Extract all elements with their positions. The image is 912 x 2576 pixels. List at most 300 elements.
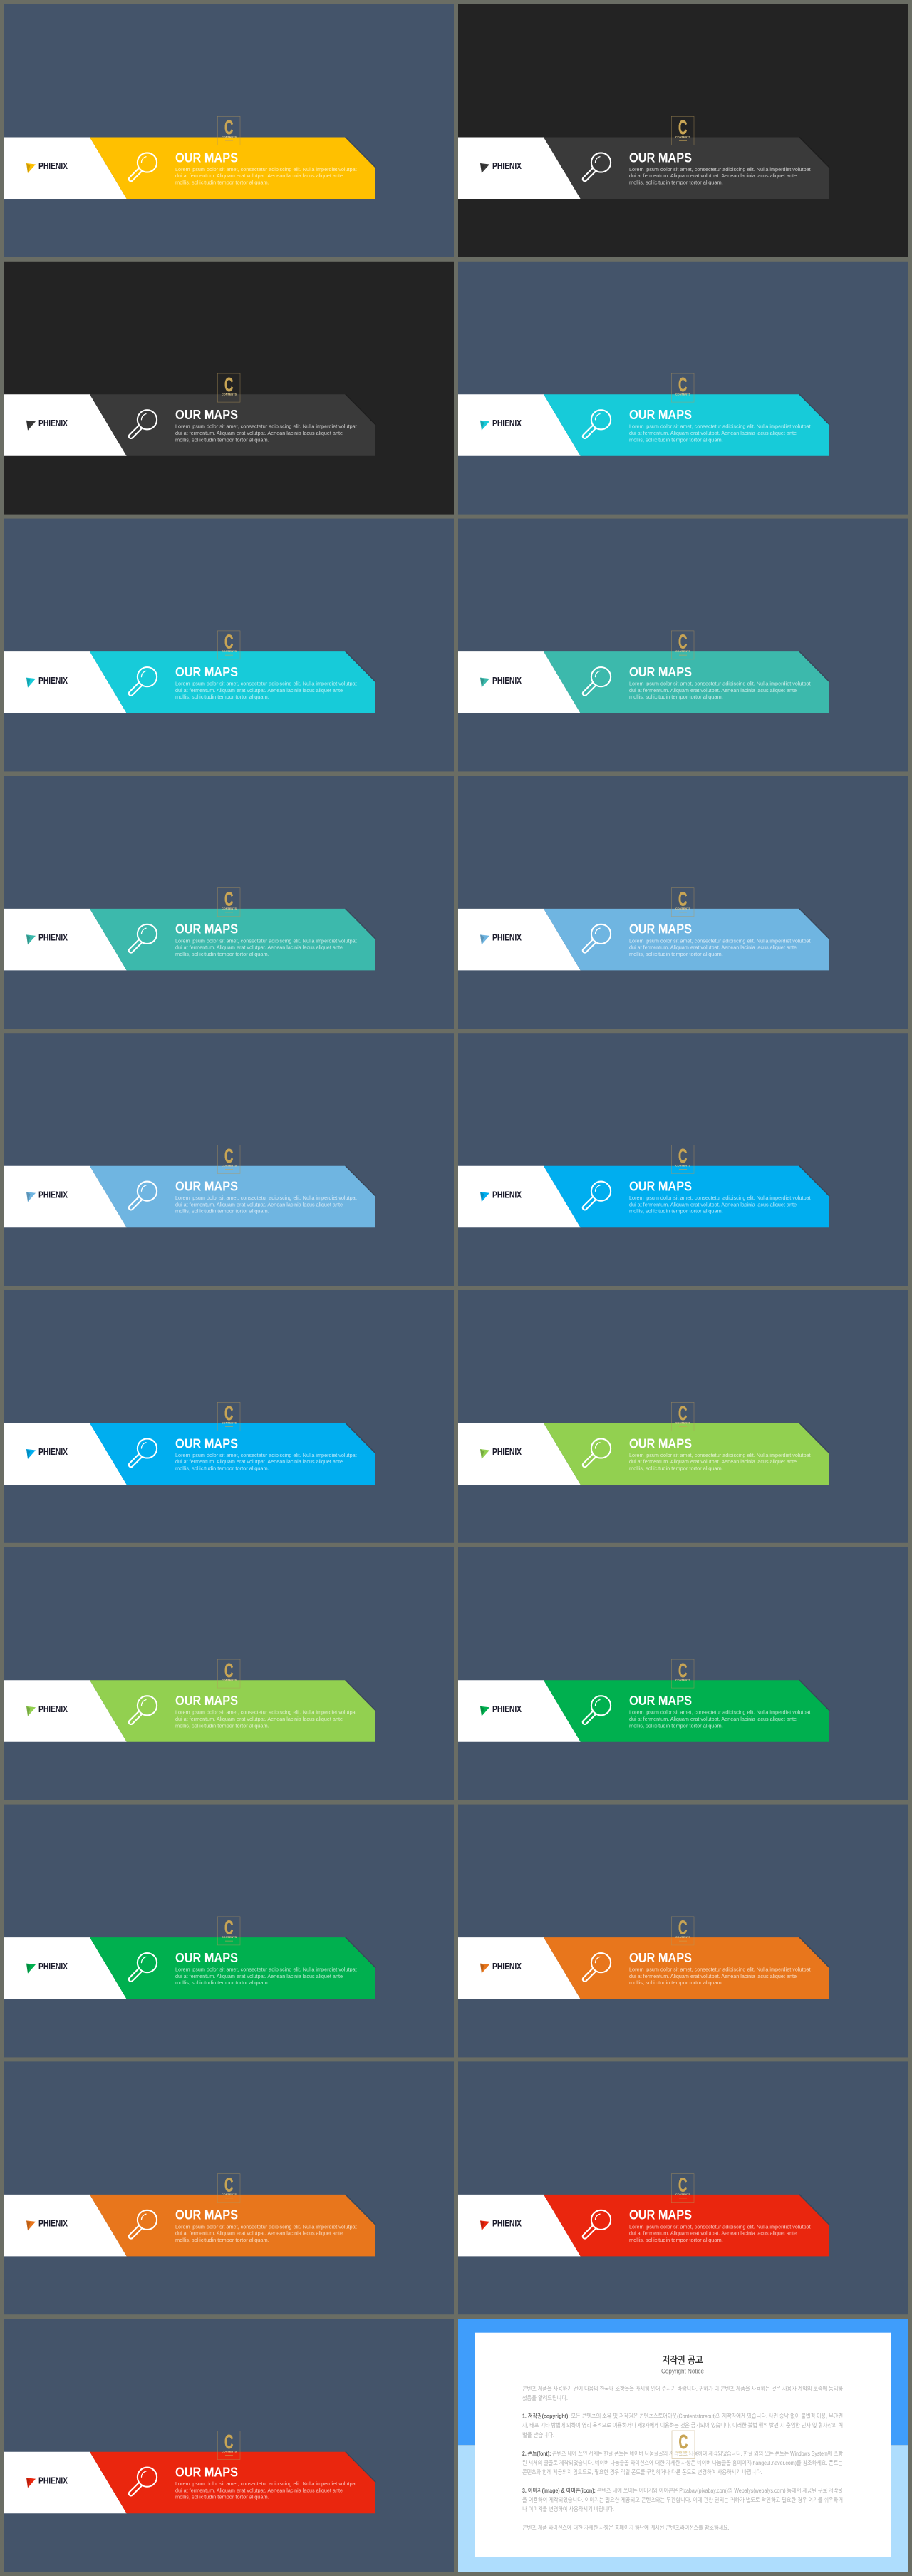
slide background (458, 1290, 908, 1543)
watermark stamp (671, 1659, 694, 1688)
white logo tab (4, 1423, 127, 1485)
notice intro (522, 2385, 843, 2401)
heading: OUR MAPS (629, 1694, 692, 1708)
body text (629, 1452, 812, 1471)
body text (175, 937, 358, 957)
panel: slide 9 light blue (4, 1033, 454, 1286)
body text: mollis, sollicitudin tempor tortor aliquam. (175, 694, 269, 700)
heading: OUR MAPS (175, 1436, 238, 1451)
icon: brand logo (26, 1449, 36, 1459)
brand name: PHIENIX (492, 933, 522, 943)
watermark stamp: CONTENTS (675, 1679, 691, 1681)
panel: copyright notice (458, 2319, 908, 2572)
body text: mollis, sollicitudin tempor tortor aliquam. (629, 694, 723, 700)
body text: Lorem ipsum dolor sit amet, consectetur adipiscing elit. Nulla imperdiet volutpat (629, 2223, 812, 2230)
icon: magnifying glass (129, 2468, 157, 2495)
icon: magnifying glass (583, 410, 611, 438)
brand name: PHIENIX (38, 2219, 68, 2229)
brand name: PHIENIX (38, 933, 68, 943)
watermark stamp: C (678, 1145, 687, 1167)
notice section 1: 사, 배포 기타 방법에 의하여 영리 목적으로 이용하거나 제3자에게 이용하는 것은 금지되어 있습니다. 이러한 불법 행위 발견 시 준엄한 민사 및 형사상의 처 (522, 2422, 843, 2429)
brand name: PHIENIX (492, 1704, 522, 1714)
watermark stamp (672, 2431, 695, 2459)
body text: dui at fermentum. Aliquam erat volutpat. Aenean lacinia lacus aliquet ante (629, 430, 797, 436)
body text: Lorem ipsum dolor sit amet, consectetur adipiscing elit. Nulla imperdiet volutpat (175, 166, 358, 172)
brand name: PHIENIX (38, 1704, 68, 1714)
coloured banner (544, 909, 829, 970)
slide background (458, 776, 908, 1029)
coloured banner (90, 137, 375, 199)
white logo tab (458, 1423, 581, 1485)
watermark stamp: C (224, 116, 233, 138)
panel: slide 6 teal (458, 519, 908, 771)
panel: slide 4 cyan (458, 262, 908, 515)
icon: brand logo (480, 1192, 489, 1202)
icon: magnifying glass (583, 2210, 611, 2239)
panel: slide 12 lime green (458, 1290, 908, 1543)
watermark stamp: C (224, 2173, 233, 2195)
coloured banner (90, 1680, 375, 1742)
coloured banner (90, 1937, 375, 1999)
heading: OUR MAPS (175, 150, 238, 165)
body text: mollis, sollicitudin tempor tortor aliquam. (175, 2494, 269, 2500)
icon: brand logo (26, 934, 36, 944)
icon: magnifying glass (583, 667, 611, 696)
white logo tab (458, 651, 581, 713)
body text: dui at fermentum. Aliquam erat volutpat. Aenean lacinia lacus aliquet ante (175, 430, 343, 436)
brand name: PHIENIX (492, 1190, 522, 1200)
body text: Lorem ipsum dolor sit amet, consectetur adipiscing elit. Nulla imperdiet volutpat (175, 1452, 358, 1458)
body text: dui at fermentum. Aliquam erat volutpat. Aenean lacinia lacus aliquet ante (175, 1716, 343, 1722)
slide background (4, 262, 454, 515)
watermark stamp: CONTENTS (675, 1165, 691, 1168)
watermark stamp: C (678, 887, 687, 910)
watermark stamp: CONTENTS (222, 650, 237, 653)
watermark stamp: C (678, 1917, 687, 1939)
panel: slide 8 light blue (458, 776, 908, 1029)
icon: brand logo (480, 1706, 489, 1716)
body text: dui at fermentum. Aliquam erat volutpat. Aenean lacinia lacus aliquet ante (629, 1201, 797, 1207)
watermark stamp: C (678, 373, 687, 396)
slide background (4, 1547, 454, 1800)
heading: OUR MAPS (629, 665, 692, 679)
slide background (458, 519, 908, 771)
white notice card (475, 2333, 891, 2557)
coloured banner (544, 1166, 829, 1227)
slide background (458, 1033, 908, 1286)
coloured banner (544, 1937, 829, 1999)
body text: mollis, sollicitudin tempor tortor aliquam. (175, 1722, 269, 1729)
icon: brand logo (26, 163, 36, 173)
body text (175, 1966, 358, 1986)
body text (175, 1452, 358, 1471)
body text: Lorem ipsum dolor sit amet, consectetur adipiscing elit. Nulla imperdiet volutpat (175, 1195, 358, 1201)
body text (175, 1709, 358, 1729)
body text: Lorem ipsum dolor sit amet, consectetur adipiscing elit. Nulla imperdiet volutpat (175, 680, 358, 686)
watermark stamp: CONTENTS (222, 2451, 237, 2453)
slide background (4, 1805, 454, 2057)
body text: mollis, sollicitudin tempor tortor aliquam. (629, 180, 723, 185)
coloured banner (90, 909, 375, 970)
heading: OUR MAPS (175, 922, 238, 937)
coloured banner (90, 651, 375, 713)
watermark stamp: CONTENTS (222, 393, 237, 396)
white logo tab (4, 909, 127, 970)
heading: OUR MAPS (175, 1179, 238, 1193)
body text (175, 423, 358, 443)
body text: dui at fermentum. Aliquam erat volutpat. Aenean lacinia lacus aliquet ante (175, 1201, 343, 1207)
white logo tab (458, 1166, 581, 1227)
watermark stamp: CONTENTS (222, 1421, 237, 1424)
body text: dui at fermentum. Aliquam erat volutpat. Aenean lacinia lacus aliquet ante (175, 2487, 343, 2493)
watermark stamp: C (678, 2431, 688, 2453)
watermark stamp: C (678, 1659, 687, 1681)
coloured banner (544, 1680, 829, 1742)
watermark stamp (671, 2173, 694, 2203)
icon: magnifying glass (583, 153, 611, 181)
brand name: PHIENIX (492, 1447, 522, 1457)
white logo tab (4, 1166, 127, 1227)
body text (629, 1966, 812, 1986)
body text: mollis, sollicitudin tempor tortor aliquam. (629, 1208, 723, 1215)
watermark stamp: C (678, 1402, 687, 1424)
watermark stamp: CONTENTS (675, 1421, 691, 1424)
panel: slide 18 red (458, 2061, 908, 2314)
brand name: PHIENIX (38, 1962, 68, 1972)
watermark stamp (217, 373, 240, 402)
body text: mollis, sollicitudin tempor tortor aliquam. (629, 1722, 723, 1729)
icon: magnifying glass (583, 1953, 611, 1982)
body text: Lorem ipsum dolor sit amet, consectetur adipiscing elit. Nulla imperdiet volutpat (629, 680, 812, 686)
icon: brand logo (480, 678, 489, 688)
watermark stamp: CONTENTS (222, 1936, 237, 1939)
watermark stamp (217, 1145, 240, 1173)
icon: magnifying glass (129, 2210, 157, 2239)
coloured banner (544, 651, 829, 713)
body text: dui at fermentum. Aliquam erat volutpat. Aenean lacinia lacus aliquet ante (175, 687, 343, 694)
body text: Lorem ipsum dolor sit amet, consectetur adipiscing elit. Nulla imperdiet volutpat (629, 1967, 812, 1973)
notice section 3 (522, 2487, 843, 2513)
brand name: PHIENIX (492, 161, 522, 171)
watermark stamp: C (678, 116, 687, 138)
watermark stamp: C (224, 2431, 233, 2453)
coloured banner (544, 1423, 829, 1485)
body text (629, 680, 812, 700)
brand name: PHIENIX (492, 418, 522, 428)
watermark stamp: CONTENTS (675, 650, 691, 653)
white logo tab (4, 394, 127, 456)
body text (629, 1709, 812, 1729)
coloured banner (90, 2452, 375, 2513)
body text: mollis, sollicitudin tempor tortor aliquam. (629, 1979, 723, 1986)
panel: slide 7 teal (4, 776, 454, 1029)
notice section 1: 1. 저작권(copyright): 모든 콘텐츠의 소유 및 저작권은 콘텐츠스토어아웃(Contentstoreout)의 제작자에게 있습니다. 사전 승낙 없이 불법적 이용, 무단전 (522, 2412, 843, 2419)
body text: Lorem ipsum dolor sit amet, consectetur adipiscing elit. Nulla imperdiet volutpat (629, 1452, 812, 1458)
icon: magnifying glass (583, 924, 611, 953)
body text: dui at fermentum. Aliquam erat volutpat. Aenean lacinia lacus aliquet ante (175, 172, 343, 179)
body text: mollis, sollicitudin tempor tortor aliquam. (175, 1208, 269, 1215)
icon: magnifying glass (583, 1182, 611, 1210)
coloured banner (544, 2195, 829, 2256)
slide background (458, 262, 908, 515)
body text: mollis, sollicitudin tempor tortor aliquam. (629, 436, 723, 443)
body text: Lorem ipsum dolor sit amet, consectetur adipiscing elit. Nulla imperdiet volutpat (629, 937, 812, 944)
watermark stamp (217, 1402, 240, 1431)
body text: Lorem ipsum dolor sit amet, consectetur adipiscing elit. Nulla imperdiet volutpat (175, 2223, 358, 2230)
notice subtitle: Copyright Notice (661, 2368, 704, 2375)
slide background (4, 776, 454, 1029)
body text: mollis, sollicitudin tempor tortor aliquam. (175, 1465, 269, 1471)
notice section 3: 을 이용하여 제작되었습니다. 이미지는 필요한 제공되고 콘텐츠와는 무관합니다. 이에 관한 권리는 귀하가 별도로 확인하고 필요한 경우 여기를 쉬우하거 (522, 2496, 843, 2503)
brand name: PHIENIX (492, 2219, 522, 2229)
white logo tab (4, 2452, 127, 2513)
heading: OUR MAPS (629, 922, 692, 937)
body text (629, 2223, 812, 2243)
watermark stamp (671, 631, 694, 659)
icon: brand logo (480, 1449, 489, 1459)
brand name: PHIENIX (38, 418, 68, 428)
blue upper background (458, 2319, 908, 2445)
brand name: PHIENIX (38, 161, 68, 171)
icon: brand logo (26, 2220, 36, 2230)
white logo tab (4, 1680, 127, 1742)
watermark stamp (217, 2173, 240, 2203)
slide background (458, 4, 908, 257)
watermark stamp: C (678, 631, 687, 653)
brand name: PHIENIX (492, 676, 522, 686)
slide background (4, 519, 454, 771)
body text (175, 1195, 358, 1215)
watermark stamp: C (224, 631, 233, 653)
watermark stamp: CONTENTS (675, 907, 691, 910)
white logo tab (458, 909, 581, 970)
slide background (458, 2061, 908, 2314)
body text: dui at fermentum. Aliquam erat volutpat. Aenean lacinia lacus aliquet ante (629, 944, 797, 951)
watermark stamp: CONTENTS (222, 907, 237, 910)
notice closing line: 콘텐츠 제품 라이선스에 대한 자세한 사항은 홈페이지 하단에 게시된 콘텐츠라이선스를 참조하세요. (522, 2524, 730, 2531)
panel: slide 15 green (4, 1805, 454, 2057)
watermark stamp: CONTENTS (222, 135, 237, 138)
brand name: PHIENIX (38, 1190, 68, 1200)
heading: OUR MAPS (175, 1951, 238, 1965)
watermark stamp: C (224, 1917, 233, 1939)
body text (175, 2480, 358, 2500)
watermark stamp: CONTENTS (222, 1165, 237, 1168)
notice section 2: 콘텐츠와 함께 제공되지 않으므로, 필요한 경우 적절 폰트를 구입하거나 다른 폰트로 변경하여 사용하시기 바랍니다. (522, 2468, 762, 2475)
icon: magnifying glass (129, 667, 157, 696)
slide background (458, 1547, 908, 1800)
icon: magnifying glass (129, 1182, 157, 1210)
body text (629, 166, 812, 185)
body text: Lorem ipsum dolor sit amet, consectetur adipiscing elit. Nulla imperdiet volutpat (629, 423, 812, 430)
icon: magnifying glass (129, 410, 157, 438)
white logo tab (458, 137, 581, 199)
watermark stamp: C (224, 373, 233, 396)
body text: Lorem ipsum dolor sit amet, consectetur adipiscing elit. Nulla imperdiet volutpat (175, 423, 358, 430)
body text: dui at fermentum. Aliquam erat volutpat. Aenean lacinia lacus aliquet ante (175, 944, 343, 951)
icon: magnifying glass (583, 1696, 611, 1724)
notice section 2 (522, 2450, 843, 2475)
body text: dui at fermentum. Aliquam erat volutpat. Aenean lacinia lacus aliquet ante (175, 1458, 343, 1465)
heading: OUR MAPS (175, 2208, 238, 2222)
body text: dui at fermentum. Aliquam erat volutpat. Aenean lacinia lacus aliquet ante (629, 172, 797, 179)
heading: OUR MAPS (175, 1694, 238, 1708)
panel: slide 3 dark (4, 262, 454, 515)
panel: slide 17 orange (4, 2061, 454, 2314)
notice title: 저작권 공고 (663, 2354, 703, 2366)
watermark stamp (217, 887, 240, 917)
body text: mollis, sollicitudin tempor tortor aliquam. (175, 1979, 269, 1986)
heading: OUR MAPS (629, 408, 692, 422)
panel: slide 1 yellow (4, 4, 454, 257)
body text: dui at fermentum. Aliquam erat volutpat. Aenean lacinia lacus aliquet ante (629, 2230, 797, 2237)
notice section 2: 2. 폰트(font): 콘텐츠 내에 쓰인 서체는 한글 폰트는 네이버 나눔글꼴의 저작물을 사용하여 제작되었습니다. 한글 외의 모든 폰트는 Windows System에 포함 (522, 2450, 843, 2457)
watermark stamp (217, 1917, 240, 1945)
icon: magnifying glass (129, 1953, 157, 1982)
notice section 3: 나 이미지를 변경하여 사용하시기 바랍니다. (522, 2505, 614, 2513)
slide background (4, 2319, 454, 2572)
heading: OUR MAPS (175, 408, 238, 422)
icon: brand logo (26, 678, 36, 688)
coloured banner (544, 137, 829, 199)
panel: slide 2 dark (458, 4, 908, 257)
body text: dui at fermentum. Aliquam erat volutpat. Aenean lacinia lacus aliquet ante (629, 1973, 797, 1979)
heading: OUR MAPS (629, 150, 692, 165)
slide background (4, 4, 454, 257)
panel: slide 11 blue (4, 1290, 454, 1543)
icon: brand logo (480, 2220, 489, 2230)
icon: brand logo (480, 421, 489, 431)
brand name: PHIENIX (38, 1447, 68, 1457)
icon: brand logo (26, 2478, 36, 2488)
body text: Lorem ipsum dolor sit amet, consectetur adipiscing elit. Nulla imperdiet volutpat (629, 1709, 812, 1716)
panel: slide 16 orange (458, 1805, 908, 2057)
body text: Lorem ipsum dolor sit amet, consectetur adipiscing elit. Nulla imperdiet volutpat (175, 937, 358, 944)
white logo tab (4, 2195, 127, 2256)
panel: slide 10 blue (458, 1033, 908, 1286)
body text: dui at fermentum. Aliquam erat volutpat. Aenean lacinia lacus aliquet ante (629, 1716, 797, 1722)
icon: brand logo (26, 421, 36, 431)
watermark stamp (217, 631, 240, 659)
slide background (4, 1033, 454, 1286)
body text: Lorem ipsum dolor sit amet, consectetur adipiscing elit. Nulla imperdiet volutpat (629, 166, 812, 172)
slide background (4, 1290, 454, 1543)
heading: OUR MAPS (629, 1436, 692, 1451)
watermark stamp: C (224, 1402, 233, 1424)
body text: dui at fermentum. Aliquam erat volutpat. Aenean lacinia lacus aliquet ante (175, 1973, 343, 1979)
body text: Lorem ipsum dolor sit amet, consectetur adipiscing elit. Nulla imperdiet volutpat (175, 1967, 358, 1973)
watermark stamp: C (224, 887, 233, 910)
icon: brand logo (480, 1964, 489, 1974)
icon: magnifying glass (129, 1696, 157, 1724)
body text (629, 1195, 812, 1215)
icon: magnifying glass (583, 1438, 611, 1467)
body text: Lorem ipsum dolor sit amet, consectetur adipiscing elit. Nulla imperdiet volutpat (629, 1195, 812, 1201)
body text (175, 680, 358, 700)
coloured banner (90, 2195, 375, 2256)
icon: brand logo (480, 163, 489, 173)
coloured banner (90, 394, 375, 456)
notice section 1 (522, 2412, 843, 2438)
body text: Lorem ipsum dolor sit amet, consectetur adipiscing elit. Nulla imperdiet volutpat (175, 2480, 358, 2487)
watermark stamp: C (224, 1659, 233, 1681)
panel: slide 5 cyan (4, 519, 454, 771)
coloured banner (544, 394, 829, 456)
body text (629, 937, 812, 957)
body text: dui at fermentum. Aliquam erat volutpat. Aenean lacinia lacus aliquet ante (175, 2230, 343, 2237)
brand name: PHIENIX (38, 2475, 68, 2485)
watermark stamp (671, 1402, 694, 1431)
white logo tab (458, 1937, 581, 1999)
panel: slide 19 red (4, 2319, 454, 2572)
watermark stamp: CONTENTS (675, 1936, 691, 1939)
watermark stamp: CONTENTS (676, 2451, 691, 2453)
body text: dui at fermentum. Aliquam erat volutpat. Aenean lacinia lacus aliquet ante (629, 687, 797, 694)
watermark stamp (671, 116, 694, 145)
icon: magnifying glass (129, 153, 157, 181)
white logo tab (458, 1680, 581, 1742)
watermark stamp (217, 116, 240, 145)
icon: brand logo (480, 934, 489, 944)
body text: Lorem ipsum dolor sit amet, consectetur adipiscing elit. Nulla imperdiet volutpat (175, 1709, 358, 1716)
watermark stamp: CONTENTS (222, 2193, 237, 2196)
icon: magnifying glass (129, 924, 157, 953)
white logo tab (4, 651, 127, 713)
watermark stamp: CONTENTS (675, 393, 691, 396)
icon: magnifying glass (129, 1438, 157, 1467)
watermark stamp: C (678, 2173, 687, 2195)
watermark stamp (217, 1659, 240, 1688)
body text (175, 2223, 358, 2243)
watermark stamp (671, 373, 694, 402)
brand name: PHIENIX (38, 676, 68, 686)
notice section 1: 벌을 받습니다. (522, 2431, 554, 2438)
heading: OUR MAPS (175, 2465, 238, 2479)
icon: brand logo (26, 1964, 36, 1974)
body text: mollis, sollicitudin tempor tortor aliquam. (629, 951, 723, 957)
watermark stamp (671, 887, 694, 917)
icon: brand logo (26, 1192, 36, 1202)
heading: OUR MAPS (629, 1179, 692, 1193)
white logo tab (4, 137, 127, 199)
icon: brand logo (26, 1706, 36, 1716)
notice intro: 콘텐츠 제품을 사용하기 전에 다음의 한국내 조항들을 자세히 읽어 주시기 바랍니다. 귀하가 이 콘텐츠 제품을 사용하는 것은 사용자 계약의 보증에 동의하 (522, 2385, 843, 2392)
body text: mollis, sollicitudin tempor tortor aliquam. (175, 951, 269, 957)
heading: OUR MAPS (629, 1951, 692, 1965)
body text: mollis, sollicitudin tempor tortor aliquam. (175, 180, 269, 185)
watermark stamp (671, 1145, 694, 1173)
body text (629, 423, 812, 443)
body text: mollis, sollicitudin tempor tortor aliquam. (175, 2237, 269, 2243)
coloured banner (90, 1166, 375, 1227)
notice section 2: 된 서체의 글꼴로 제작되었습니다. 네이버 나눔글꼴 라이선스에 대한 자세한 사항은 네이버 나눔글꼴 홈페이지(hangeul.naver.com)를 참조하세요. 폰트는 (522, 2459, 843, 2466)
body text: mollis, sollicitudin tempor tortor aliquam. (629, 1465, 723, 1471)
body text: mollis, sollicitudin tempor tortor aliquam. (175, 436, 269, 443)
watermark stamp: CONTENTS (222, 1679, 237, 1681)
notice section 3: 3. 이미지(image) & 아이콘(icon): 콘텐츠 내에 쓰이는 이미지와 아이콘은 Pixabay(pixabay.com)와 Webalys(webalys.com) 등에서 제공된 무료 저작물 (522, 2487, 843, 2494)
white logo tab (4, 1937, 127, 1999)
watermark stamp (671, 1917, 694, 1945)
body text: dui at fermentum. Aliquam erat volutpat. Aenean lacinia lacus aliquet ante (629, 1458, 797, 1465)
heading: OUR MAPS (175, 665, 238, 679)
panel: slide 13 lime green (4, 1547, 454, 1800)
coloured banner (90, 1423, 375, 1485)
white logo tab (458, 394, 581, 456)
slide background (458, 1805, 908, 2057)
watermark stamp: CONTENTS (675, 135, 691, 138)
slide background (4, 2061, 454, 2314)
brand name: PHIENIX (492, 1962, 522, 1972)
